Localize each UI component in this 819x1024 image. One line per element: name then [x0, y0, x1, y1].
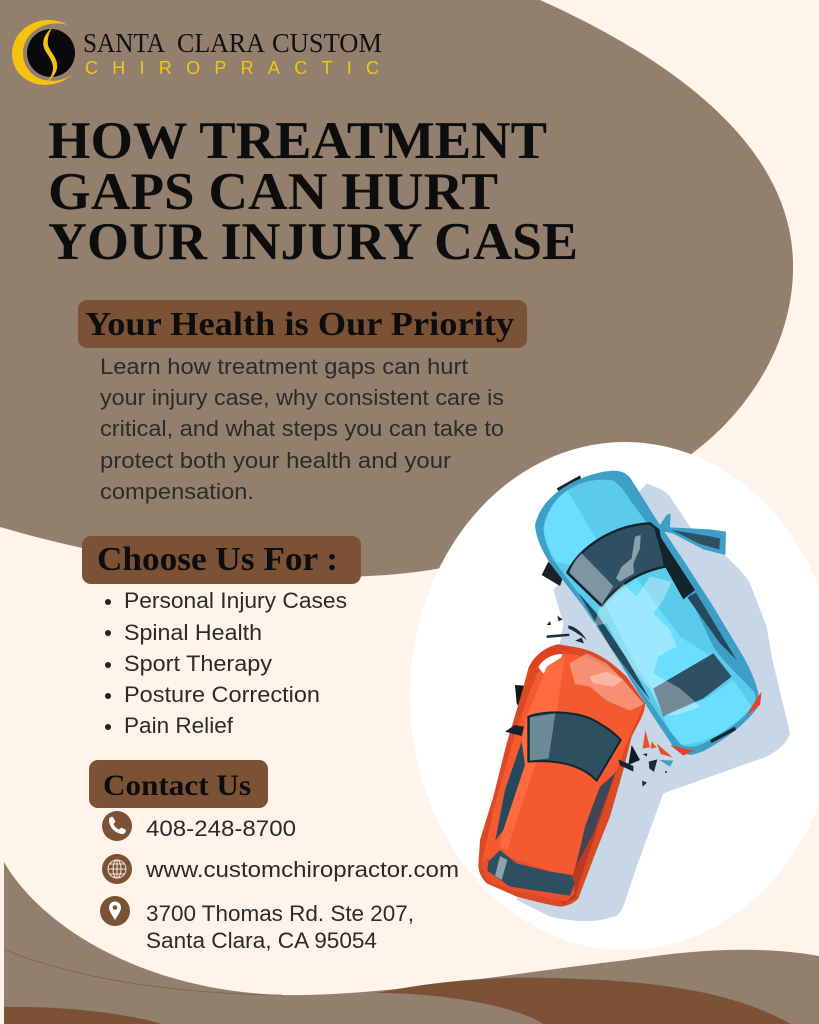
title: HOW TREATMENT [48, 112, 547, 170]
rear window [653, 653, 732, 716]
red debris [643, 730, 673, 757]
logo name: CUSTOM [272, 28, 382, 58]
title [48, 112, 578, 271]
bottom trunk fill [482, 858, 575, 902]
body outline [535, 471, 760, 755]
light strip [500, 655, 565, 850]
logo name: SANTA [83, 28, 165, 58]
address: Santa Clara, CA 95054 [146, 928, 377, 953]
title: YOUR INJURY CASE [48, 213, 578, 271]
icon: globe [102, 854, 132, 884]
smoke [569, 653, 644, 711]
blue car [535, 471, 762, 756]
services list: Spinal Health [124, 620, 262, 645]
smoke on windshield [616, 535, 641, 582]
body fill [482, 654, 643, 878]
debris [547, 616, 667, 787]
background blob: top taupe shape [0, 0, 793, 577]
windshield [567, 523, 665, 606]
icon: crescent and spine [12, 20, 75, 85]
right mirror [618, 759, 633, 772]
heading chip: Contact Us: Contact Us [103, 769, 251, 802]
front wheel bar [557, 475, 581, 492]
bottom waves [4, 862, 819, 1024]
rear window [487, 850, 574, 896]
boot highlight [663, 680, 752, 745]
icon: map pin [100, 896, 130, 926]
right side window [687, 593, 737, 660]
address: 3700 Thomas Rd. Ste 207, [146, 901, 414, 926]
logo [12, 20, 382, 85]
phone number: 408-248-8700 [146, 816, 296, 841]
black side strip [653, 525, 695, 599]
right wheel [628, 745, 640, 765]
hood highlight [544, 491, 600, 565]
mirror wheel [542, 562, 563, 586]
services list: Pain Relief [124, 713, 234, 738]
windshield reflection [530, 713, 555, 761]
services list: Posture Correction [124, 682, 320, 707]
intro text block: protect both your health and your [100, 448, 451, 473]
intro text block: your injury case, why consistent care is [100, 385, 504, 410]
body outline [478, 644, 645, 907]
left side window [578, 593, 651, 701]
services list [105, 588, 347, 738]
left rear wheel [515, 685, 529, 712]
blue debris [659, 760, 673, 767]
logo name [83, 28, 382, 58]
left mirror [505, 725, 524, 736]
heading chip: Your Health is Our Priority: Your Health is Our Priority [85, 306, 514, 343]
heading chip: Contact Us [89, 760, 268, 808]
dark right side [562, 770, 617, 905]
intro text block: critical, and what steps you can take to [100, 416, 504, 441]
red car [478, 644, 645, 907]
intro text block [100, 354, 504, 504]
illustration: car crash [478, 471, 790, 921]
body fill [543, 480, 756, 747]
left side window [495, 742, 525, 841]
open door [657, 513, 726, 555]
smoke [593, 577, 701, 715]
front lamp arc [528, 644, 573, 668]
rear bar and tail lights [710, 727, 736, 743]
heading chip: Your Health is Our Priority [78, 300, 527, 348]
address [146, 901, 414, 953]
services list: Sport Therapy [124, 651, 272, 676]
services list: Personal Injury Cases [124, 588, 347, 613]
website: www.customchiropractor.com [145, 857, 459, 882]
intro text block: compensation. [100, 479, 254, 504]
right side window [576, 773, 615, 866]
title: GAPS CAN HURT [48, 163, 498, 221]
logo subtitle: CHIROPRACTIC [85, 58, 379, 78]
roof highlight [605, 578, 712, 690]
rear window reflection [495, 856, 507, 880]
logo name: CLARA [177, 28, 265, 58]
windshield [528, 712, 621, 781]
intro text block: Learn how treatment gaps can hurt [100, 354, 468, 379]
windshield reflection [569, 553, 613, 604]
heading chip: Choose Us For [82, 536, 361, 584]
icon: phone [102, 811, 132, 841]
car shadow [517, 483, 790, 921]
heading chip: Choose Us For: Choose Us For : [97, 541, 338, 578]
white ellipse behind the cars [410, 442, 819, 950]
headlight [538, 654, 563, 673]
